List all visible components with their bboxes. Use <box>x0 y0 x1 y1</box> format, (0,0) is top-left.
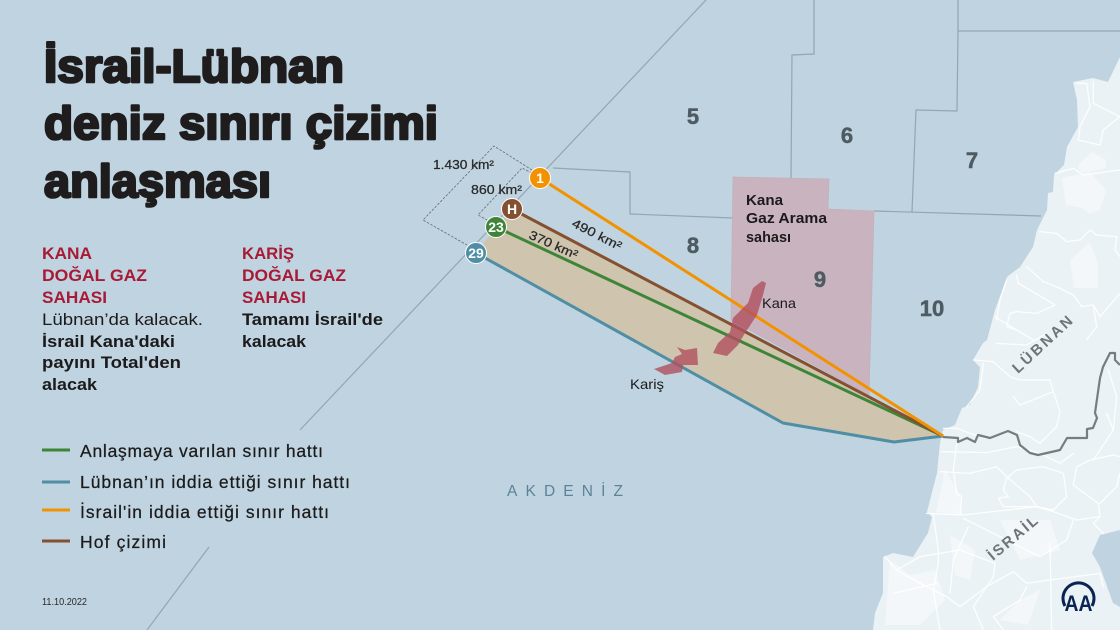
roads south <box>885 333 1120 630</box>
marker: H: H <box>507 201 517 217</box>
text block: Kana gas field: Lübnan’da kalacak. <box>42 311 203 329</box>
text block: Karish gas field: kalacak <box>242 333 307 351</box>
text block: Kana gas field: payını Total'den <box>42 354 181 372</box>
gas field: Karish <box>654 347 698 375</box>
marker: 23 <box>486 216 506 238</box>
label: Kana exploration area: Kana <box>746 192 784 209</box>
disputed zone fill <box>476 209 943 442</box>
legend <box>42 441 350 552</box>
block numbers: 8 <box>687 233 699 258</box>
logo: AA: AA <box>1064 591 1093 616</box>
logo: AA <box>1063 583 1094 616</box>
lake <box>1092 530 1120 607</box>
block numbers: 6 <box>841 123 853 148</box>
text block: Kana gas field: DOĞAL GAZ <box>42 266 147 285</box>
dashed area brackets <box>423 146 532 245</box>
panel: Kana gas exploration area <box>731 177 874 395</box>
text block: Kana gas field: İsrail Kana'daki <box>42 333 175 351</box>
label: Kana exploration area: sahası <box>746 229 791 246</box>
line Hof <box>512 209 943 436</box>
area labels: 860 km² <box>471 183 522 197</box>
label: Kana exploration area: Gaz Arama <box>746 210 828 227</box>
text block: Karish gas field: DOĞAL GAZ <box>242 266 346 285</box>
legend: Hof çizimi <box>80 532 166 552</box>
marker: 1 <box>530 168 550 188</box>
label: Mediterranean: AKDENİZ <box>507 482 623 500</box>
area labels: 370 km² <box>527 228 580 262</box>
text block: Kana gas field: KANA <box>42 245 92 263</box>
marker: 1: 1 <box>536 170 544 186</box>
legend: Anlaşmaya varılan sınır hattı <box>80 441 323 461</box>
marker: 29 <box>466 242 486 264</box>
label: Kana exploration area <box>746 192 828 246</box>
marker: 29: 29 <box>468 245 484 261</box>
border lines <box>476 178 943 442</box>
label: Lebanon: LÜBNAN <box>1009 313 1076 377</box>
line 23 agreed <box>496 227 943 436</box>
block numbers: 5 <box>687 104 699 129</box>
date: 11.10.2022 <box>42 596 87 608</box>
text block: Kana gas field: SAHASI <box>42 289 107 307</box>
gas field: Kana <box>713 281 766 356</box>
block numbers: 10 <box>920 296 944 321</box>
map: land with roads <box>873 57 1120 630</box>
area labels <box>433 158 624 262</box>
legend: Lübnan’ın iddia ettiği sınır hattı <box>80 472 350 492</box>
text block: Kana gas field: alacak <box>42 376 98 394</box>
line 1 Israel claim <box>540 178 943 436</box>
area labels: 1.430 km² <box>433 158 494 172</box>
marker: H <box>502 198 522 220</box>
roads north <box>995 82 1120 340</box>
title: deniz sınırı çizimi <box>44 97 438 149</box>
marker: 23: 23 <box>488 219 504 235</box>
land border: Lebanon-Israel <box>943 353 1120 455</box>
label: Karish field: Kariş <box>630 376 664 392</box>
label: Israel: İSRAİL <box>985 512 1042 564</box>
block numbers: 7 <box>966 148 978 173</box>
text block: Kana gas field <box>42 245 203 394</box>
text block: Karish gas field: Tamamı İsrail'de <box>242 311 383 329</box>
text block: Karish gas field: SAHASI <box>242 289 306 307</box>
title: anlaşması <box>44 155 271 207</box>
text block: Karish gas field: KARİŞ <box>242 245 294 263</box>
legend: İsrail'in iddia ettiği sınır hattı <box>80 502 329 522</box>
line 29 Lebanon claim <box>476 253 943 442</box>
text block: Karish gas field <box>242 245 383 351</box>
title: İsrail-Lübnan <box>44 40 344 92</box>
urban patches <box>885 152 1106 625</box>
title <box>44 40 438 207</box>
block numbers: 9 <box>814 267 826 292</box>
area labels: 490 km² <box>570 216 624 253</box>
label: Kana field: Kana <box>762 295 796 311</box>
block numbers <box>687 104 978 321</box>
